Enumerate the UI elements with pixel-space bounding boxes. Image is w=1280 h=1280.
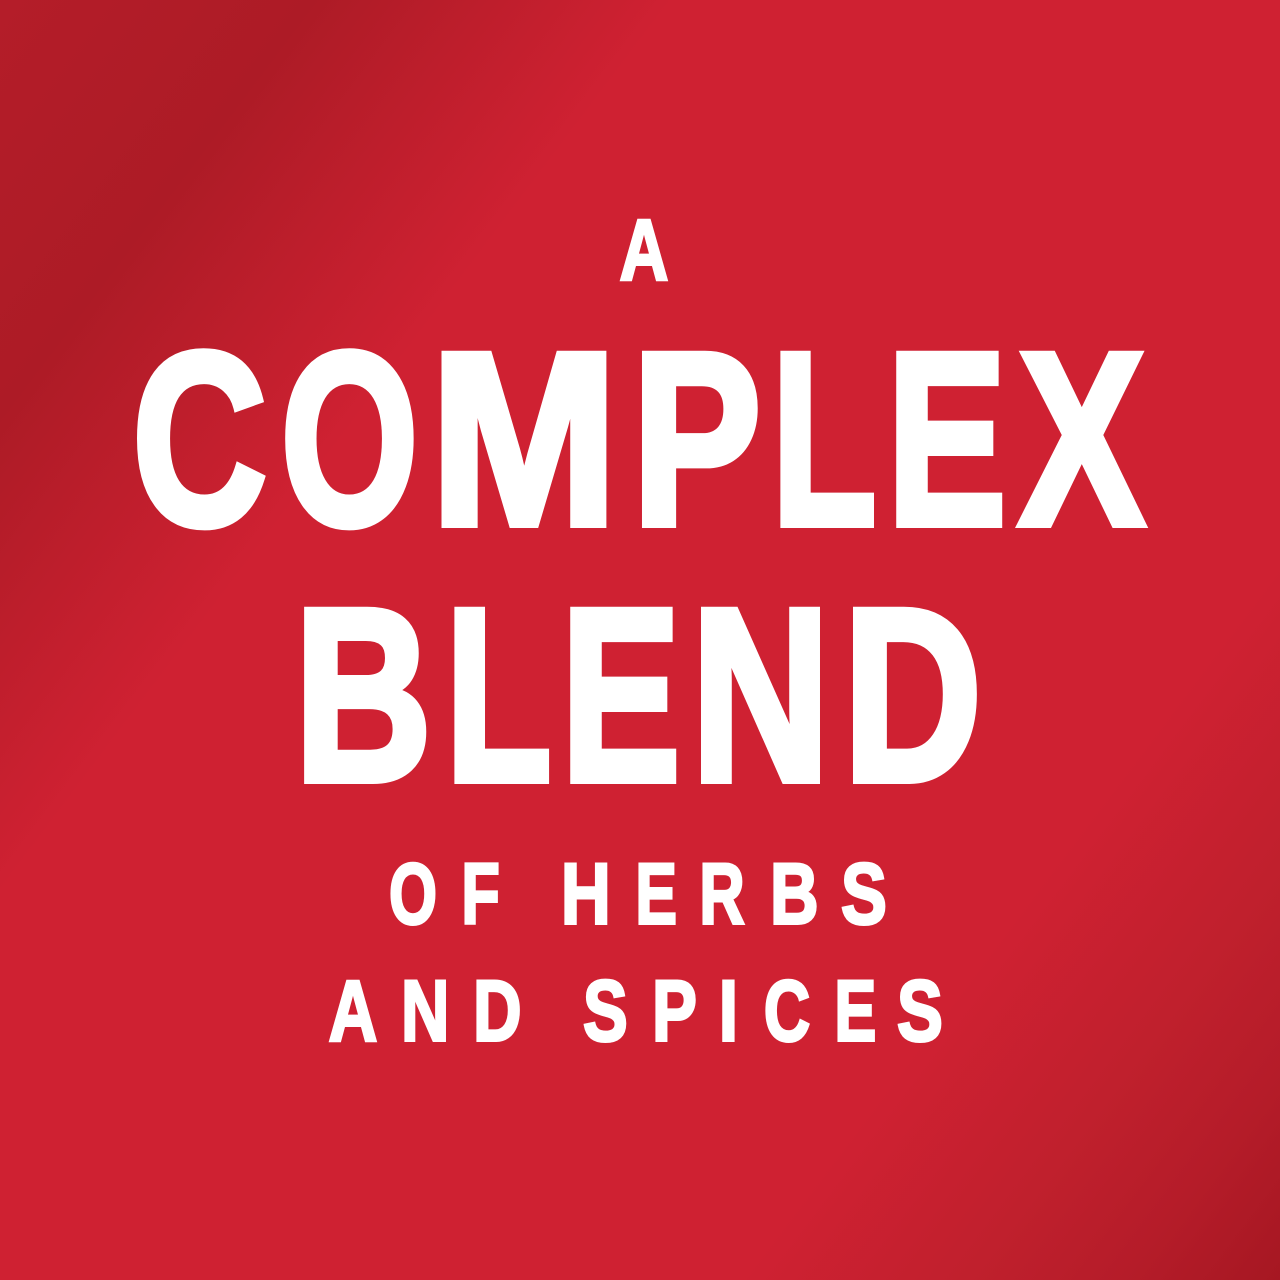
heading word: COMPLEX: E <box>887 302 1006 577</box>
heading line: OF HERBS: H <box>561 846 611 942</box>
heading word: COMPLEX: M <box>430 302 618 577</box>
heading line: AND SPICES: S <box>583 964 628 1060</box>
heading word: BLEND: L <box>446 558 552 833</box>
heading word: COMPLEX: X <box>1019 302 1144 577</box>
heading line: OF HERBS: S <box>841 846 887 942</box>
heading line: OF HERBS: B <box>770 846 818 942</box>
heading line: AND SPICES: D <box>473 964 522 1060</box>
heading line: AND SPICES: A <box>329 964 377 1060</box>
heading word: COMPLEX: O <box>281 302 418 577</box>
heading word: BLEND: N <box>691 558 830 833</box>
heading line: AND SPICES: C <box>764 964 810 1060</box>
heading word: COMPLEX: L <box>772 302 876 577</box>
heading word: BLEND: D <box>843 558 982 833</box>
heading line: OF HERBS: E <box>635 846 677 942</box>
heading line: AND SPICES: E <box>834 964 876 1060</box>
heading line: AND SPICES: S <box>897 964 943 1060</box>
heading line: OF HERBS: O <box>389 846 437 942</box>
heading line: AND SPICES: I <box>719 964 738 1060</box>
heading line: OF HERBS: F <box>461 846 500 942</box>
heading word: BLEND: E <box>561 558 680 833</box>
heading word: BLEND: B <box>294 558 432 833</box>
heading word: A: A <box>620 202 668 298</box>
heading line: OF HERBS: R <box>699 846 745 942</box>
heading line: AND SPICES: N <box>401 964 449 1060</box>
heading word: COMPLEX: C <box>132 302 267 577</box>
heading line: AND SPICES: P <box>652 964 697 1060</box>
heading word: COMPLEX: P <box>632 302 761 577</box>
